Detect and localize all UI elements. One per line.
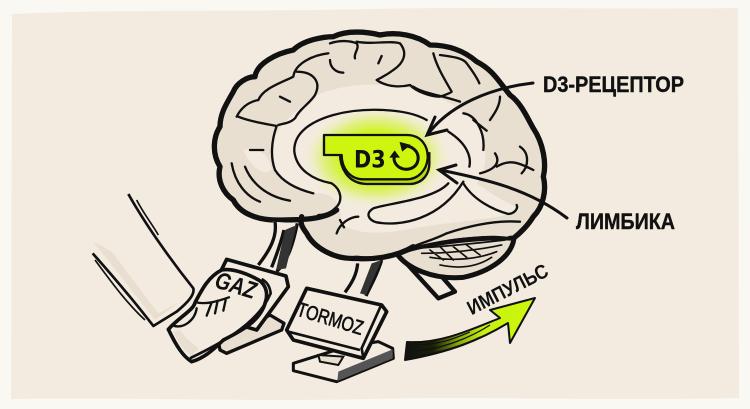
label: limbic: ЛИМБИКА [576, 209, 675, 234]
trouser leg [93, 194, 194, 326]
tormoz pedal base [293, 342, 393, 382]
tormoz pedal stem [345, 260, 382, 297]
cerebellum [397, 238, 514, 278]
gaz label: GAZ [212, 267, 260, 305]
temporal folds [413, 183, 520, 247]
D3 label: D3 [354, 146, 386, 174]
white matter light zone [272, 85, 520, 233]
label: impulse: ИМПУЛЬС [464, 260, 552, 320]
inner cingulate line [369, 132, 470, 223]
brain stem [403, 260, 455, 298]
light patch left lobe [243, 149, 272, 172]
limbic loop [294, 110, 427, 215]
glow behind whistle [302, 106, 452, 209]
sole edge [190, 279, 271, 358]
cycle icon [390, 142, 418, 169]
whistle: D3 receptor [324, 135, 429, 184]
impulse arrow [405, 298, 535, 360]
tormoz pedal plate [287, 288, 387, 358]
cortex folds [232, 41, 533, 233]
whistle shadow [340, 153, 429, 184]
arrow to limbic [439, 165, 567, 218]
shoe [168, 267, 271, 362]
arrow to d3 receptor [427, 83, 533, 135]
brain outer fill [214, 32, 545, 259]
pedals and foot [93, 194, 393, 382]
gaz pedal plate [200, 259, 288, 330]
brain outline [214, 32, 545, 259]
brain [214, 32, 545, 298]
tormoz label: TORMOZ [294, 299, 366, 340]
label: D3-receptor: D3-РЕЦЕПТОР [543, 72, 684, 97]
laces [172, 297, 229, 326]
gaz pedal stem [258, 222, 297, 272]
whistle body [324, 135, 428, 179]
shoe shading [173, 330, 198, 357]
gaz pedal base [218, 315, 284, 353]
